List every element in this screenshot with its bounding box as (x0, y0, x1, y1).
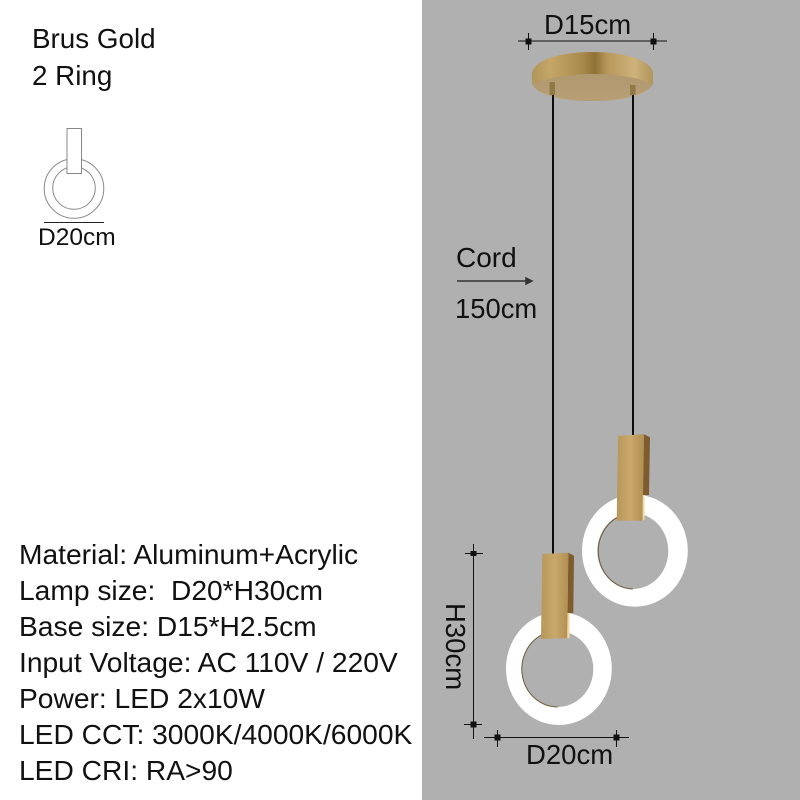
upper ring lamp (582, 434, 688, 607)
specifications list: Material: Aluminum+Acrylic (19, 538, 358, 570)
height label: H30cm (440, 603, 471, 690)
cord left (552, 95, 554, 554)
cord label: Cord (456, 242, 517, 273)
heading: finish and ring count: 2 Ring (32, 60, 112, 91)
cord right (632, 95, 634, 436)
panel: grey product background (422, 0, 800, 800)
icon: ring lamp outline (44, 128, 104, 218)
heading: finish and ring count (32, 23, 156, 91)
ceiling canopy (532, 52, 653, 101)
lower ring lamp (506, 553, 612, 725)
lamp diameter dimension line (484, 730, 629, 747)
icon diameter label: D20cm (38, 224, 116, 251)
specifications list: Base size: D15*H2.5cm (19, 610, 317, 642)
height dimension line (464, 544, 483, 739)
base diameter label: D15cm (544, 9, 631, 40)
specifications list: LED CCT: 3000K/4000K/6000K (19, 718, 413, 750)
heading: finish and ring count: Brus Gold (32, 23, 156, 54)
base diameter dimension line (518, 33, 667, 50)
icon dimension line (44, 222, 104, 223)
specifications list: Lamp size: D20*H30cm (19, 574, 323, 606)
specifications list: Input Voltage: AC 110V / 220V (19, 646, 398, 678)
specifications list: LED CRI: RA>90 (19, 754, 233, 786)
cord length label: 150cm (455, 293, 537, 324)
specifications list: Power: LED 2x10W (19, 682, 265, 714)
specifications list (19, 538, 413, 786)
lamp diameter label: D20cm (526, 739, 613, 770)
cord arrow (457, 278, 532, 284)
